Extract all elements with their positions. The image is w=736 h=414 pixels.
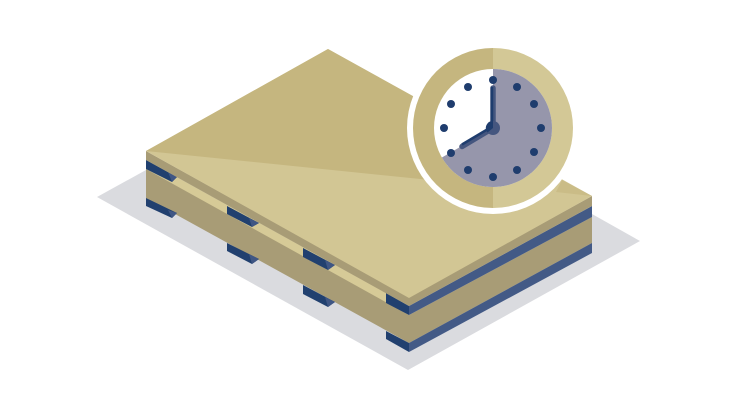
clock white halo: [407, 42, 579, 214]
gap strip under top board: [146, 160, 386, 304]
pallet: [146, 49, 592, 352]
hour dots: [440, 76, 545, 181]
top face: [146, 49, 592, 298]
floor shadow: [97, 170, 640, 370]
lower pallet boards: [146, 169, 592, 352]
clock hands: [462, 87, 500, 146]
clock ring: [413, 48, 573, 208]
elapsed time wedge: [442, 69, 552, 187]
upper blocks: [146, 160, 409, 315]
top board sides: [146, 151, 592, 306]
upper navy strip: [409, 206, 592, 315]
clock face: [434, 69, 552, 187]
lower blocks: [146, 198, 409, 352]
clock: [407, 42, 579, 214]
